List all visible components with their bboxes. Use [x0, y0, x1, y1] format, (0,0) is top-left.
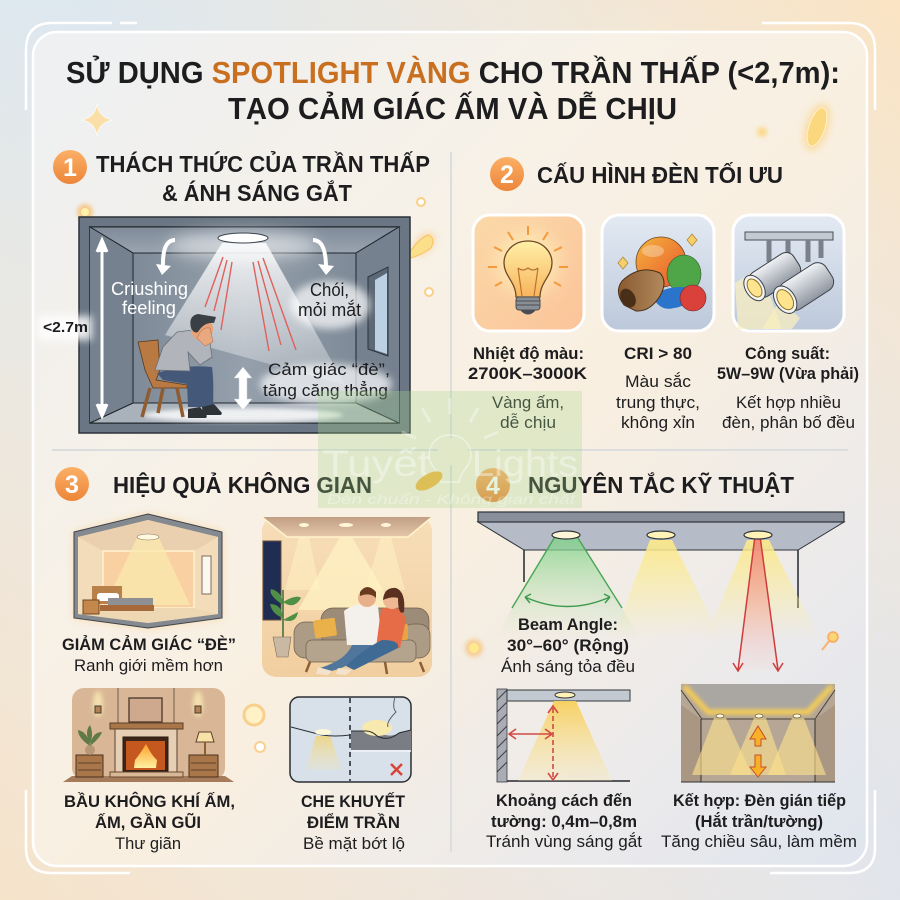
- config labels: trung thực,: [616, 393, 700, 412]
- wall distance label: [486, 791, 642, 851]
- indirect cove lighting diagram: [681, 684, 835, 782]
- room callouts: Cảm giác “đè”,: [268, 360, 390, 379]
- room callouts: mỏi mắt: [298, 299, 361, 320]
- beam angle label: Beam Angle:: [518, 615, 618, 634]
- recessed lamps: [552, 531, 772, 539]
- plant: [270, 589, 301, 657]
- height label: <2.7m: [43, 319, 88, 336]
- dividers: [52, 152, 848, 852]
- ceiling lamp: [218, 233, 268, 243]
- beam angle label: Ánh sáng tỏa đều: [501, 657, 635, 676]
- config labels: CRI > 80: [624, 344, 692, 363]
- config labels: Màu sắc: [625, 372, 692, 391]
- illustration: fireplace: [63, 688, 234, 782]
- height label: [38, 316, 92, 340]
- illustration: couple in warm living room: [262, 517, 432, 677]
- beam angle ceiling diagram: [478, 512, 844, 671]
- wall distance diagram: [497, 689, 630, 782]
- ceiling glow: [168, 231, 318, 259]
- compression arrow: [234, 367, 252, 410]
- light beam: [165, 243, 345, 385]
- watermark: Tuyết: [322, 443, 431, 484]
- title: TẠO CẢM GIÁC ẤM VÀ DỄ CHỊU: [228, 91, 677, 126]
- window: [368, 267, 388, 356]
- icon: warm light bulb: [473, 215, 584, 331]
- icon: track spotlights: [733, 215, 844, 331]
- section 4 heading: NGUYÊN TẮC KỸ THUẬT: [528, 471, 794, 498]
- section 3 heading: 3: [65, 471, 79, 499]
- glare rays: [205, 257, 296, 351]
- sofa: [294, 608, 430, 674]
- config labels: [468, 344, 859, 432]
- config labels: Công suất:: [745, 344, 830, 363]
- indirect lighting label: (Hắt trần/tường): [695, 812, 823, 831]
- indirect lighting label: [661, 791, 857, 851]
- section 1 heading: 1: [63, 154, 77, 182]
- couple: [316, 587, 406, 675]
- benefit label: hide ceiling flaws: [301, 792, 406, 853]
- section 1 heading: & ÁNH SÁNG GẮT: [162, 179, 352, 206]
- beam angle label: 30°–60° (Rộng): [507, 636, 629, 655]
- wall distance label: Tránh vùng sáng gắt: [486, 832, 642, 851]
- watermark: Lights: [472, 443, 578, 484]
- indirect lighting label: Tăng chiều sâu, làm mềm: [661, 832, 857, 851]
- section 4 heading: 4: [486, 472, 500, 500]
- benefit label: warm atmosphere: Thư giãn: [115, 834, 181, 853]
- title: [66, 54, 840, 126]
- room callouts: [111, 279, 392, 404]
- pressure arrows: [156, 240, 334, 275]
- benefit label: hide ceiling flaws: Bề mặt bớt lộ: [303, 834, 405, 853]
- room callouts: Criushing: [111, 279, 188, 299]
- section 1 heading: [53, 149, 430, 206]
- section 4 heading: [476, 468, 794, 502]
- room callouts: feeling: [122, 298, 176, 318]
- section 2 heading: [490, 157, 783, 191]
- benefit label: reduced pressure: [62, 635, 236, 675]
- watermark: Đèn chuẩn - Không gian chất: [327, 491, 577, 507]
- illustration: hiding ceiling flaws: [290, 697, 411, 782]
- config labels: 5W–9W (Vừa phải): [717, 364, 859, 383]
- config labels: Vàng ấm,: [492, 393, 564, 412]
- narrow red beam: [738, 536, 778, 670]
- benefit label: warm atmosphere: BẦU KHÔNG KHÍ ẤM,: [64, 792, 235, 811]
- benefit label: reduced pressure: GIẢM CẢM GIÁC “ĐÈ”: [62, 635, 236, 654]
- height arrow: [97, 240, 107, 416]
- section 3 heading: [55, 467, 372, 501]
- low ceiling room illustration: [38, 217, 410, 433]
- section 1 heading: THÁCH THỨC CỦA TRẦN THẤP: [96, 149, 430, 177]
- config labels: 2700K–3000K: [468, 364, 588, 383]
- benefit label: warm atmosphere: ẤM, GẦN GŨI: [95, 812, 201, 832]
- section 2 heading: 2: [500, 161, 514, 189]
- benefit label: reduced pressure: Ranh giới mềm hơn: [74, 656, 223, 675]
- section 2 heading: CẤU HÌNH ĐÈN TỐI ƯU: [537, 161, 783, 188]
- room callouts: Chói,: [310, 280, 349, 300]
- illustration: bedroom with soft boundaries: [74, 514, 222, 628]
- decorative sparkles: [77, 101, 838, 752]
- yellow beams: [612, 540, 722, 640]
- green wide beam: [495, 535, 640, 640]
- indirect lighting label: Kết hợp: Đèn gián tiếp: [673, 791, 846, 810]
- config labels: dễ chịu: [500, 413, 556, 432]
- watermark: [318, 391, 582, 508]
- section 3 heading: HIỆU QUẢ KHÔNG GIAN: [113, 470, 372, 498]
- config labels: không xỉn: [621, 413, 695, 432]
- room callouts: tăng căng thẳng: [263, 381, 388, 400]
- benefit label: hide ceiling flaws: CHE KHUYẾT: [301, 792, 406, 811]
- config labels: Nhiệt độ màu:: [473, 344, 584, 363]
- title: SỬ DỤNG SPOTLIGHT VÀNG CHO TRẦN THẤP (<2,7m):: [66, 54, 840, 90]
- benefit label: hide ceiling flaws: ĐIỂM TRẦN: [307, 813, 400, 832]
- beam angle label: [501, 615, 635, 676]
- seated man with head in hands: [138, 314, 222, 418]
- wall distance label: tường: 0,4m–0,8m: [491, 812, 637, 831]
- wall distance label: Khoảng cách đến: [496, 791, 632, 810]
- icon: colour rendering orbs: [602, 215, 714, 331]
- config labels: Kết hợp nhiều: [736, 393, 841, 412]
- config labels: đèn, phân bố đều: [722, 413, 855, 432]
- benefit label: warm atmosphere: [64, 792, 235, 853]
